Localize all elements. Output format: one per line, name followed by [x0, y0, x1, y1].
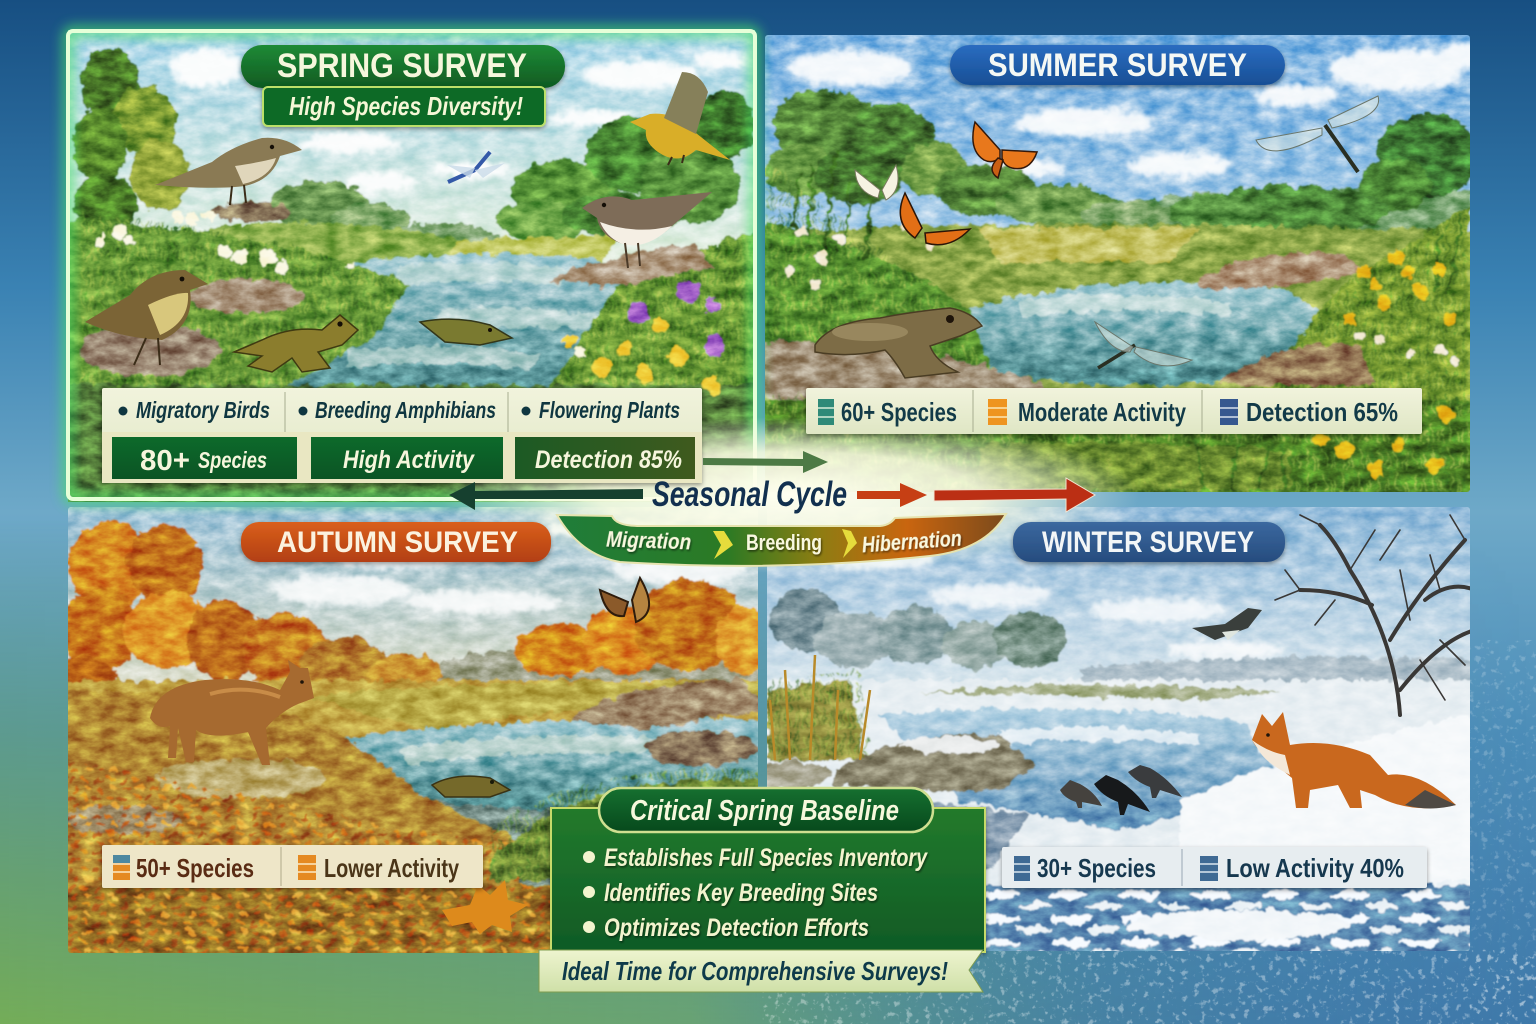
panel: autumn survey — [55, 495, 775, 960]
callout bullet list: Identifies Key Breeding Sites — [604, 879, 878, 907]
winter landscape painting — [750, 495, 1490, 960]
spring diversity badge — [263, 87, 545, 126]
butterfly: white — [855, 165, 898, 200]
arrow: long red — [934, 478, 1095, 512]
callout bullet list — [583, 844, 928, 942]
winter activity stat: Low Activity 40% — [1226, 853, 1404, 883]
butterfly: orange — [973, 122, 1037, 178]
autumn species stat — [113, 853, 254, 883]
bird: top left — [155, 138, 302, 205]
toad — [815, 308, 982, 378]
callout ribbon — [539, 950, 983, 992]
bare tree — [1275, 515, 1475, 715]
winter species stat — [1014, 853, 1156, 883]
summer species stat: 60+ Species — [841, 397, 957, 427]
callout ribbon: Ideal Time for Comprehensive Surveys! — [562, 956, 948, 986]
spring detection stat — [515, 437, 695, 479]
panel: winter survey — [750, 495, 1490, 960]
callout bullet list: Establishes Full Species Inventory — [604, 844, 928, 872]
winter heading: WINTER SURVEY — [1042, 526, 1254, 559]
summer heading: SUMMER SURVEY — [988, 47, 1247, 83]
panel: summer survey — [765, 35, 1470, 492]
summer data table — [806, 388, 1422, 434]
callout heading: Critical Spring Baseline — [630, 795, 899, 827]
summer activity stat — [988, 397, 1186, 427]
frog: left — [234, 315, 358, 372]
summer landscape painting — [765, 35, 1470, 492]
autumn heading — [241, 522, 551, 562]
frog — [432, 776, 510, 797]
reeds — [770, 655, 870, 760]
autumn species stat: 50+ Species — [136, 853, 254, 883]
frog: pond — [420, 319, 512, 345]
dragonfly: upper — [1256, 96, 1379, 172]
dragonfly: lower — [1095, 322, 1192, 368]
curved ribbon: phases: Breeding — [746, 530, 822, 555]
summer activity stat: Moderate Activity — [1018, 397, 1186, 427]
bird: yellow flying — [630, 72, 730, 165]
bird: lower left — [85, 270, 208, 365]
seasonal cycle title: Seasonal Cycle — [652, 475, 847, 514]
spring data table — [102, 388, 702, 483]
crows — [1060, 765, 1182, 815]
spring species stat — [112, 437, 297, 479]
spring activity stat — [311, 437, 503, 479]
spring heading: SPRING SURVEY — [277, 47, 527, 85]
spring detection stat: Detection 85% — [535, 446, 682, 474]
winter data table — [1002, 847, 1427, 888]
spring habitat items — [118, 397, 680, 423]
spring highlight frame — [68, 31, 755, 499]
fox — [1252, 712, 1456, 808]
callout panel — [551, 808, 985, 952]
spring diversity badge: High Species Diversity! — [289, 91, 523, 121]
summer detection stat: Detection 65% — [1246, 397, 1398, 427]
butterfly — [600, 578, 649, 622]
dragonfly: blue — [447, 152, 505, 182]
spring habitat items: Migratory Birds — [136, 397, 270, 423]
spring activity stat: High Activity — [343, 446, 475, 474]
autumn data table — [102, 845, 483, 888]
spring habitat items: Flowering Plants — [539, 397, 680, 423]
arrow: short red — [857, 483, 927, 507]
arrow: to autumn — [449, 482, 643, 510]
bird: sandpiper — [582, 192, 712, 268]
spring species stat: 80+ — [140, 445, 190, 477]
curved ribbon: phases: Hibernation — [861, 526, 963, 557]
autumn heading: AUTUMN SURVEY — [277, 526, 518, 559]
curved ribbon: phases: Migration — [606, 527, 692, 554]
arrow: spring to summer — [703, 451, 828, 473]
spring landscape painting — [55, 20, 770, 505]
maple leaf — [442, 880, 528, 934]
panel: spring survey — [55, 20, 770, 505]
spring habitat items: Breeding Amphibians — [315, 397, 496, 423]
callout heading — [599, 788, 933, 832]
seasonal cycle hub — [449, 451, 1095, 566]
summer species stat — [818, 397, 957, 427]
autumn activity stat: Lower Activity — [324, 853, 459, 883]
callout: critical spring baseline — [539, 788, 985, 992]
butterfly: orange low — [900, 193, 970, 245]
deer — [150, 660, 314, 765]
autumn landscape painting — [55, 495, 775, 960]
flying bird — [1192, 608, 1262, 640]
autumn activity stat — [298, 853, 459, 883]
curved ribbon: phases — [557, 514, 1006, 566]
central haze — [440, 417, 1140, 573]
spring species stat: Species — [198, 447, 267, 473]
winter species stat: 30+ Species — [1037, 853, 1156, 883]
callout bullet list: Optimizes Detection Efforts — [604, 914, 869, 942]
